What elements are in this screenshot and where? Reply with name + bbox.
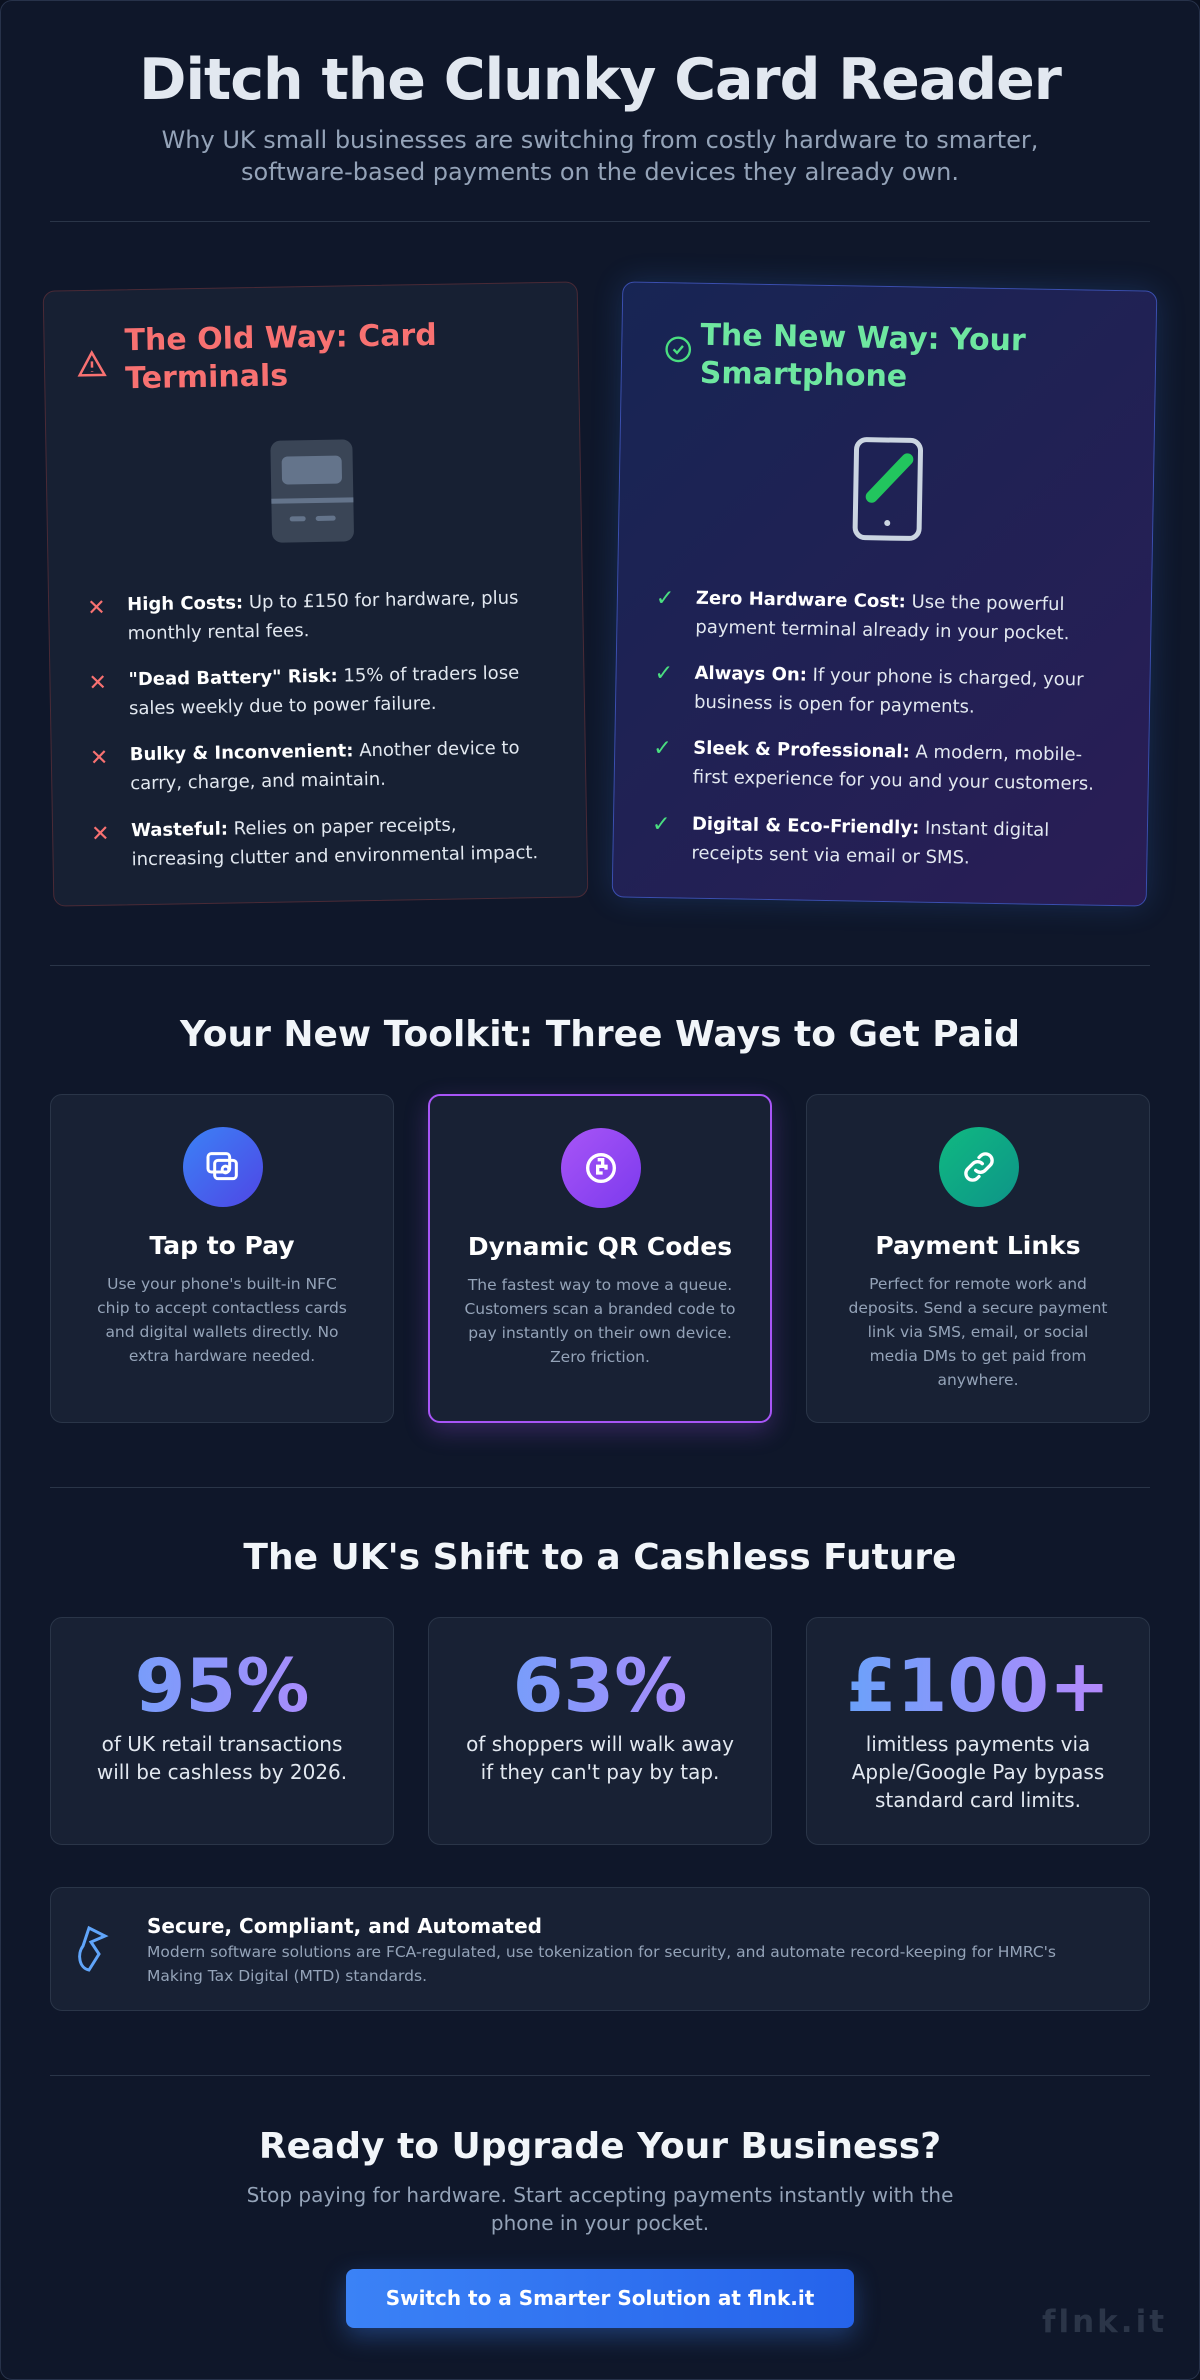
icon: qr: [561, 1128, 641, 1208]
card: payment links: [806, 1094, 1150, 1423]
watermark: flnk.it: [1042, 2304, 1167, 2340]
subtitle: [162, 126, 1038, 186]
list: new way benefits: Digital & Eco-Friendly: Instant digital receipts sent via email or SMS.: [691, 814, 1049, 869]
list: new way benefits: ✓: [654, 661, 673, 686]
heading: old way: Terminals: [125, 358, 288, 396]
list: new way benefits: ✓: [652, 812, 671, 837]
list: old way drawbacks: [87, 587, 538, 870]
cta text: phone in your pocket.: [491, 2211, 709, 2235]
icon: smartphone: [852, 437, 923, 541]
list: old way drawbacks: Bulky & Inconvenient: Another device to carry, charge, and maintain.: [130, 737, 520, 794]
icon: link: [939, 1127, 1019, 1207]
heading: new way: The New Way: Your: [700, 318, 1026, 358]
button: [346, 2269, 854, 2328]
panel: security: Secure, Compliant, and Automated: [147, 1914, 542, 1938]
cta text: Stop paying for hardware. Start accepting payments instantly with the: [247, 2183, 953, 2207]
stat: 95%: of UK retail transactions will be cashless by 2026.: [97, 1732, 347, 1784]
list: old way drawbacks: High Costs: Up to £150 for hardware, plus monthly rental fees.: [127, 587, 519, 644]
list: new way benefits: ✓: [656, 586, 675, 611]
icon: shield hand: [78, 1926, 108, 1972]
subtitle: software-based payments on the devices they already own.: [241, 158, 959, 186]
list: old way drawbacks: Wasteful: Relies on paper receipts, increasing clutter and environmental impact.: [131, 815, 538, 870]
list: old way drawbacks: ✕: [91, 822, 110, 847]
button: Switch to a Smarter Solution at flnk.it: [386, 2286, 814, 2310]
panel: security: [50, 1887, 1150, 2011]
stat: 63%: [428, 1617, 772, 1845]
title: Ditch the Clunky Card Reader: [139, 47, 1061, 113]
card: tap to pay: [50, 1094, 394, 1423]
stat: 63%: 63%: [513, 1644, 687, 1729]
card: tap to pay: Tap to Pay: [149, 1231, 295, 1260]
panel: security: Modern software solutions are FCA-regulated, use tokenization for security, and automate record-keeping for HMRC's Making Tax Digital (MTD) standards.: [147, 1943, 1056, 1985]
list: new way benefits: Zero Hardware Cost: Use the powerful payment terminal already in your pocket.: [695, 588, 1070, 644]
list: new way benefits: Sleek & Professional: A modern, mobile-first experience for you and your customers.: [693, 738, 1094, 795]
panel: old way: [43, 281, 588, 907]
icon: card terminal: [270, 439, 354, 543]
icon: check circle: [665, 336, 692, 362]
list: new way benefits: ✓: [653, 736, 672, 761]
stat: 63%: of shoppers will walk away if they can't pay by tap.: [466, 1732, 734, 1784]
stat: 95%: [50, 1617, 394, 1845]
icon: warning: [78, 350, 107, 377]
list: new way benefits: [652, 586, 1094, 869]
stat: £100+: limitless payments via Apple/Google Pay bypass standard card limits.: [852, 1732, 1104, 1812]
heading: old way: [124, 318, 437, 396]
list: old way drawbacks: "Dead Battery" Risk: 15% of traders lose sales weekly due to power failure.: [128, 662, 519, 719]
card: QR codes: Dynamic QR Codes: [468, 1232, 732, 1261]
stat: £100+: £100+: [846, 1644, 1110, 1729]
card: QR codes: The fastest way to move a queue. Customers scan a branded code to pay instantly on their own device. Zero friction.: [464, 1276, 736, 1366]
stat: £100+: [806, 1617, 1150, 1845]
list: old way drawbacks: ✕: [90, 746, 108, 771]
panel: new way: [612, 281, 1157, 907]
heading: new way: Smartphone: [700, 356, 908, 394]
subtitle: Why UK small businesses are switching from costly hardware to smarter,: [162, 126, 1038, 154]
card: QR codes: [428, 1094, 772, 1423]
heading: new way: [700, 318, 1026, 394]
heading: cta: Ready to Upgrade Your Business?: [259, 2126, 941, 2167]
heading: old way: The Old Way: Card: [124, 318, 437, 358]
cta text: [247, 2183, 953, 2235]
card: tap to pay: Use your phone's built-in NFC chip to accept contactless cards and digital wallets directly. No extra hardware needed.: [97, 1275, 347, 1365]
card: payment links: Perfect for remote work and deposits. Send a secure payment link via SMS, email, or social media DMs to get paid from anywhere.: [848, 1275, 1107, 1389]
card: payment links: Payment Links: [875, 1231, 1081, 1260]
stat: 95%: 95%: [135, 1644, 309, 1729]
icon: tap: [183, 1127, 263, 1207]
list: new way benefits: Always On: If your phone is charged, your business is open for payments.: [694, 663, 1084, 718]
list: old way drawbacks: ✕: [88, 671, 107, 696]
heading: toolkit: Your New Toolkit: Three Ways to Get Paid: [180, 1014, 1020, 1055]
heading: cashless: The UK's Shift to a Cashless Future: [243, 1537, 957, 1578]
list: old way drawbacks: ✕: [87, 596, 106, 621]
